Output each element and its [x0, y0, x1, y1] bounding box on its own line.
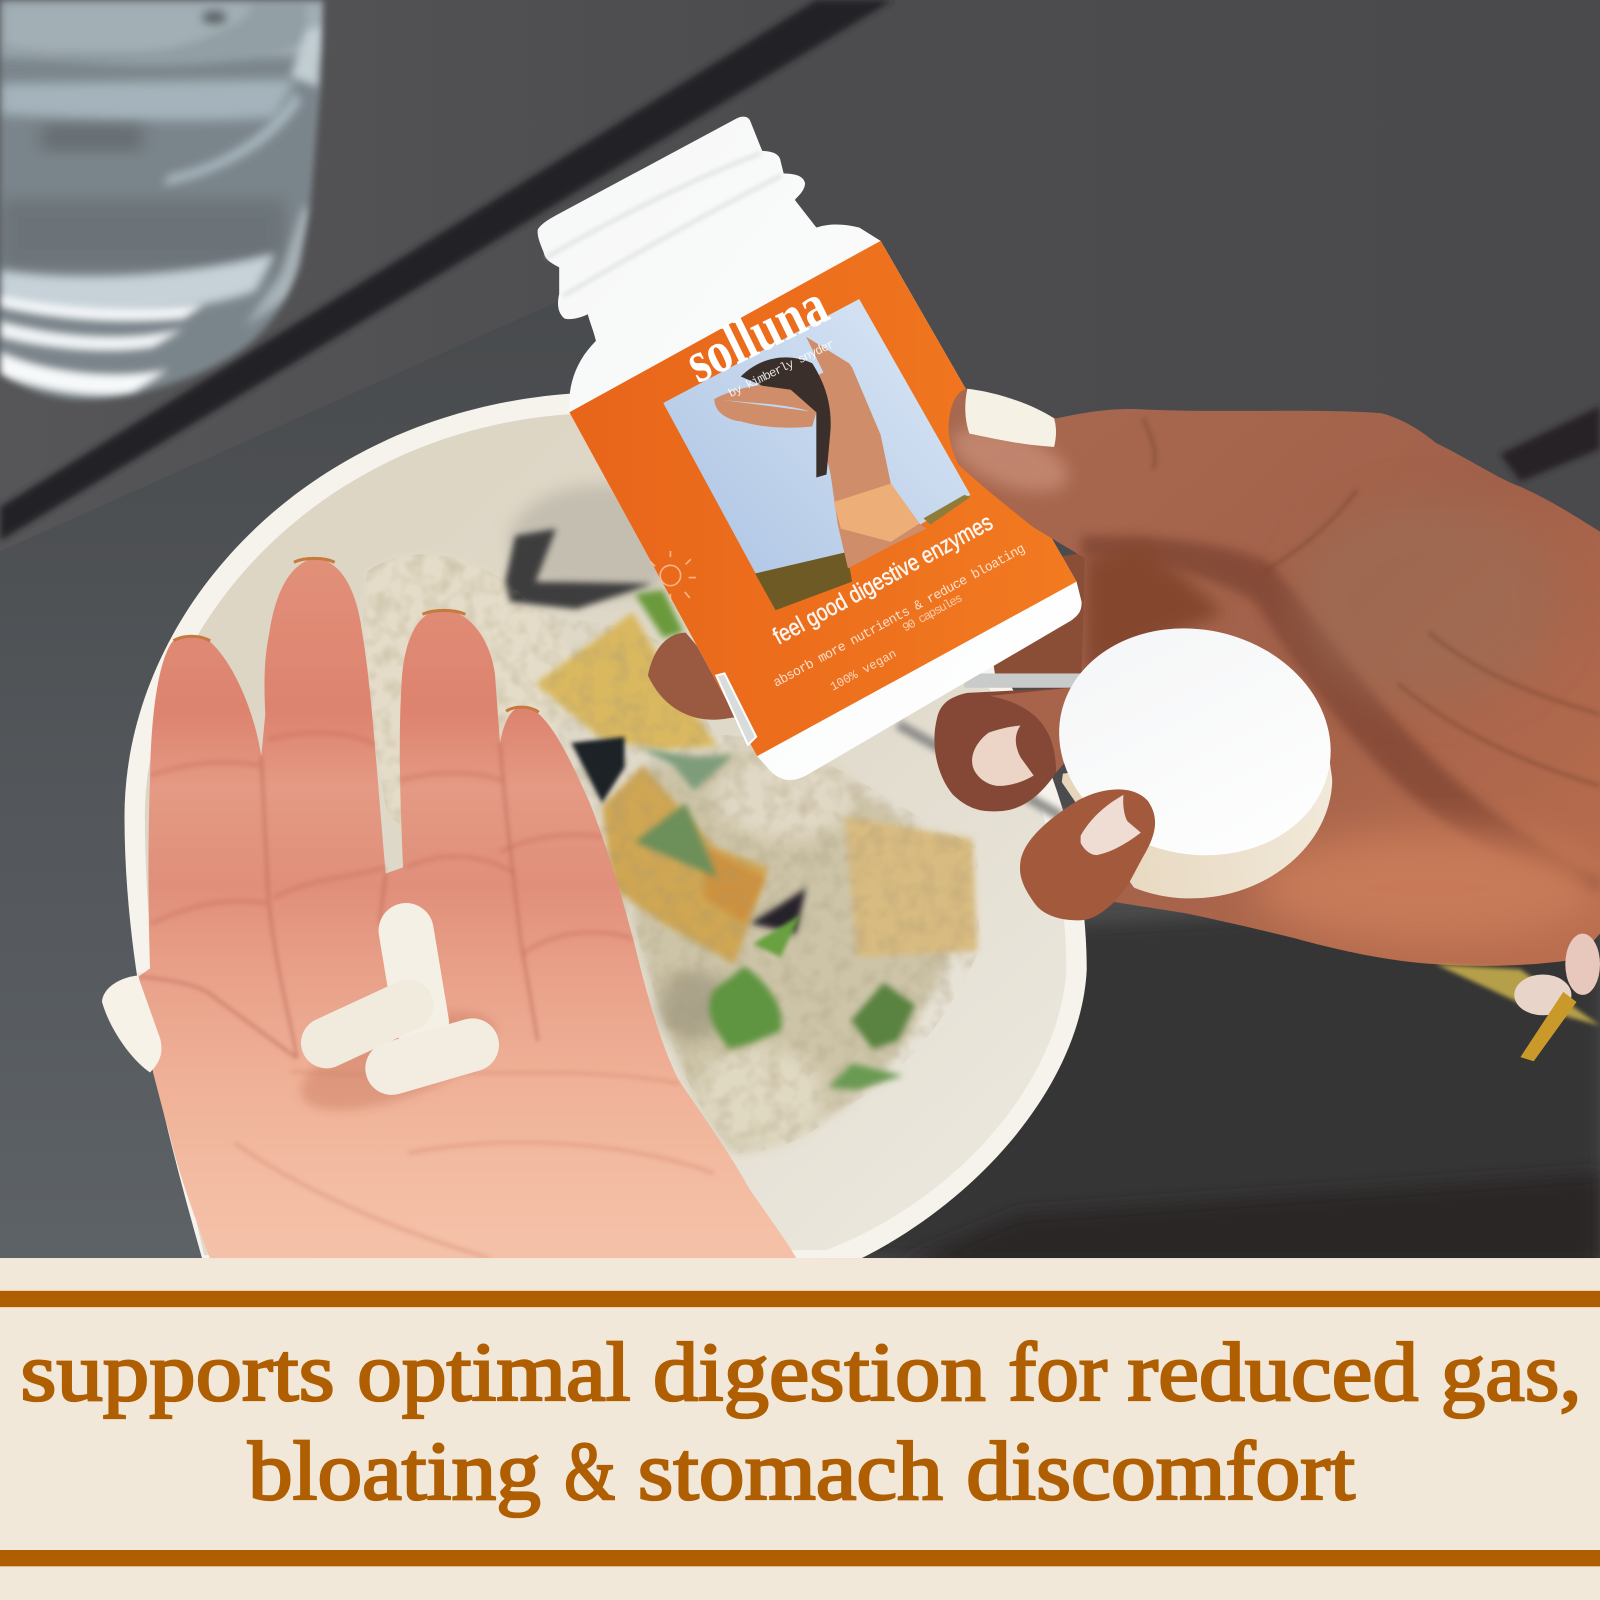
caption text: reduced	[1128, 1326, 1418, 1419]
caption text: &	[564, 1425, 615, 1518]
label copy: absorb more nutrients & reduce bloating	[771, 541, 1028, 691]
bottle body	[538, 117, 1082, 780]
left hand, palm up	[102, 558, 797, 1259]
right hand, fingers behind bottle	[648, 551, 1092, 816]
bowl	[124, 392, 1087, 1265]
table background	[0, 0, 1600, 1265]
top rule	[0, 1291, 1600, 1307]
caption text: gas,	[1441, 1326, 1582, 1419]
drinking glass	[0, 0, 327, 403]
food: rice, tofu and greens	[357, 529, 990, 1163]
label brand: solluna	[675, 271, 838, 395]
thumb nail	[965, 389, 1056, 447]
label brand	[690, 297, 832, 397]
caption text	[20, 1326, 1582, 1518]
gold bracelet and ring	[1436, 934, 1600, 1061]
caption band	[0, 1258, 1600, 1600]
capsules in palm	[290, 931, 506, 1131]
caption text: digestion	[653, 1326, 986, 1419]
orange label	[569, 241, 1077, 756]
supplement bottle	[538, 117, 1082, 780]
right hand: lower finger with nail	[1020, 789, 1155, 920]
caption text: for	[1008, 1326, 1107, 1419]
label photo	[663, 299, 970, 610]
caption text: stomach	[638, 1425, 943, 1518]
label brand: by kimberly snyder	[726, 337, 837, 401]
caption text: supports	[20, 1326, 335, 1419]
label copy: feel good digestive enzymes	[769, 509, 997, 649]
finger creases	[139, 743, 538, 1058]
caption text: discomfort	[966, 1425, 1355, 1518]
caption text: optimal	[357, 1326, 631, 1419]
bottom rule	[0, 1550, 1600, 1566]
bottle cap	[1059, 628, 1332, 898]
right hand: thumb and palm	[944, 389, 1600, 966]
right hand: upper finger with nail	[934, 688, 1071, 811]
caption text: bloating	[248, 1425, 541, 1518]
photo: hands holding supplement bottle over a bowl	[0, 0, 1600, 1265]
sun icon on label	[650, 551, 696, 601]
label copy: 100% vegan	[828, 647, 899, 694]
label copy: 90 capsules	[900, 591, 965, 635]
barcode on label edge	[716, 673, 756, 745]
fingertip edges	[173, 558, 539, 712]
thumb nail	[102, 976, 161, 1072]
